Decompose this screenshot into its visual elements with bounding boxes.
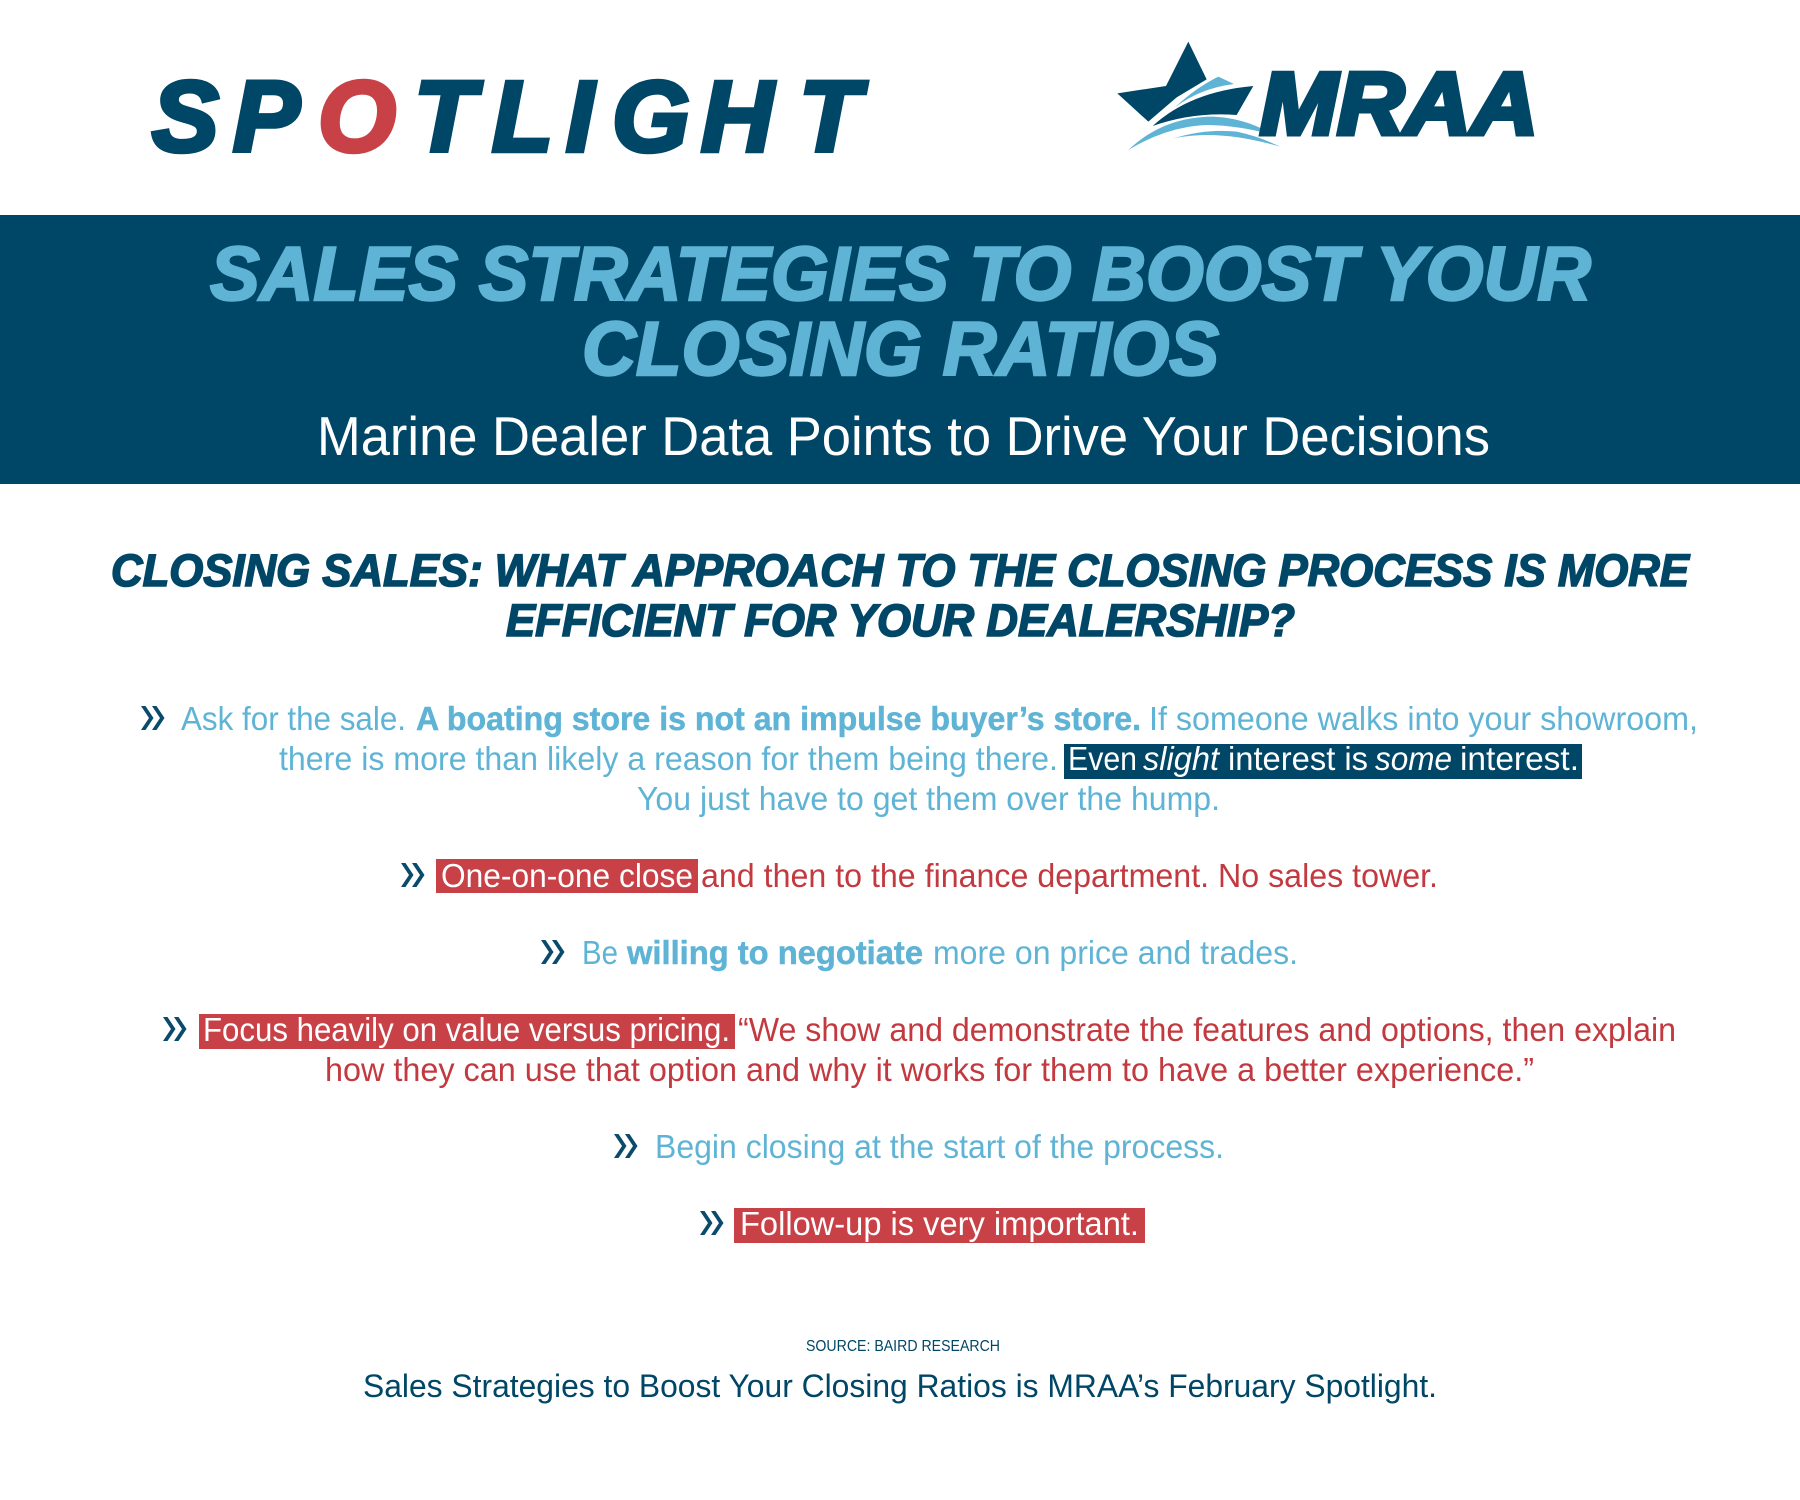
- bullet: focus on value: [163, 1011, 1676, 1088]
- banner title: [210, 232, 1591, 392]
- banner title: CLOSING RATIOS: [582, 307, 1219, 392]
- bullet: ask for the sale: [141, 700, 1698, 817]
- bullet text: interest is: [1228, 740, 1368, 777]
- bullet: begin closing: [614, 1128, 1224, 1165]
- bullet text: A boating store is not an impulse buyer’s store.: [416, 700, 1141, 737]
- icon: chevrons: [541, 940, 564, 964]
- icon: chevrons: [141, 706, 164, 730]
- bullet text: more on price and trades.: [933, 934, 1298, 971]
- bullet text: slight: [1143, 740, 1221, 777]
- icon: chevrons: [614, 1134, 638, 1158]
- bullet text: You just have to get them over the hump.: [637, 780, 1220, 817]
- bullet text: Focus heavily on value versus pricing.: [203, 1011, 730, 1048]
- banner: [0, 215, 1800, 484]
- bullet text: willing to negotiate: [626, 934, 923, 971]
- bullet: willing to negotiate: [541, 934, 1298, 971]
- logo text: MRAA: [1260, 54, 1538, 153]
- bullet text: how they can use that option and why it works for them to have a better experience.”: [325, 1051, 1534, 1088]
- icon: chevrons: [401, 863, 424, 887]
- bullet text: [582, 934, 1298, 971]
- source note: SOURCE: BAIRD RESEARCH: [806, 1338, 1000, 1355]
- bullet text: [199, 1011, 1676, 1088]
- footer text: Sales Strategies to Boost Your Closing Ratios is MRAA’s February Spotlight.: [363, 1368, 1437, 1404]
- banner title: SALES STRATEGIES TO BOOST YOUR: [210, 232, 1591, 317]
- section heading: CLOSING SALES: WHAT APPROACH TO THE CLOSING PROCESS IS MORE: [111, 545, 1691, 596]
- bullet text: interest.: [1460, 740, 1579, 777]
- banner subtitle: Marine Dealer Data Points to Drive Your Decisions: [317, 405, 1490, 467]
- section heading: EFFICIENT FOR YOUR DEALERSHIP?: [506, 595, 1295, 646]
- spotlight wordmark: SPOTLIGHT: [152, 61, 868, 173]
- bullet: one-on-one close: [401, 857, 1438, 894]
- bullet text: some: [1375, 740, 1452, 777]
- bullet text: Ask for the sale.: [181, 700, 406, 737]
- bullet text: Be: [582, 934, 618, 971]
- icon: star boat: [1117, 42, 1280, 150]
- icon: chevrons: [700, 1211, 724, 1235]
- bullet text: Begin closing at the start of the process.: [655, 1128, 1224, 1165]
- section heading: [111, 545, 1691, 646]
- bullet text: and then to the finance department. No sales tower.: [701, 857, 1438, 894]
- bullet text: “We show and demonstrate the features and options, then explain: [738, 1011, 1676, 1048]
- MRAA logo: [1117, 42, 1538, 153]
- bullet: follow-up: [700, 1205, 1145, 1243]
- icon: chevrons: [163, 1017, 186, 1041]
- bullet text: Follow-up is very important.: [740, 1205, 1139, 1242]
- bullet text: One-on-one close: [441, 857, 693, 894]
- bullet text: [181, 700, 1698, 817]
- bullet text: there is more than likely a reason for them being there.: [279, 740, 1058, 777]
- bullet text: If someone walks into your showroom,: [1149, 700, 1698, 737]
- bullet text: Even: [1068, 740, 1137, 777]
